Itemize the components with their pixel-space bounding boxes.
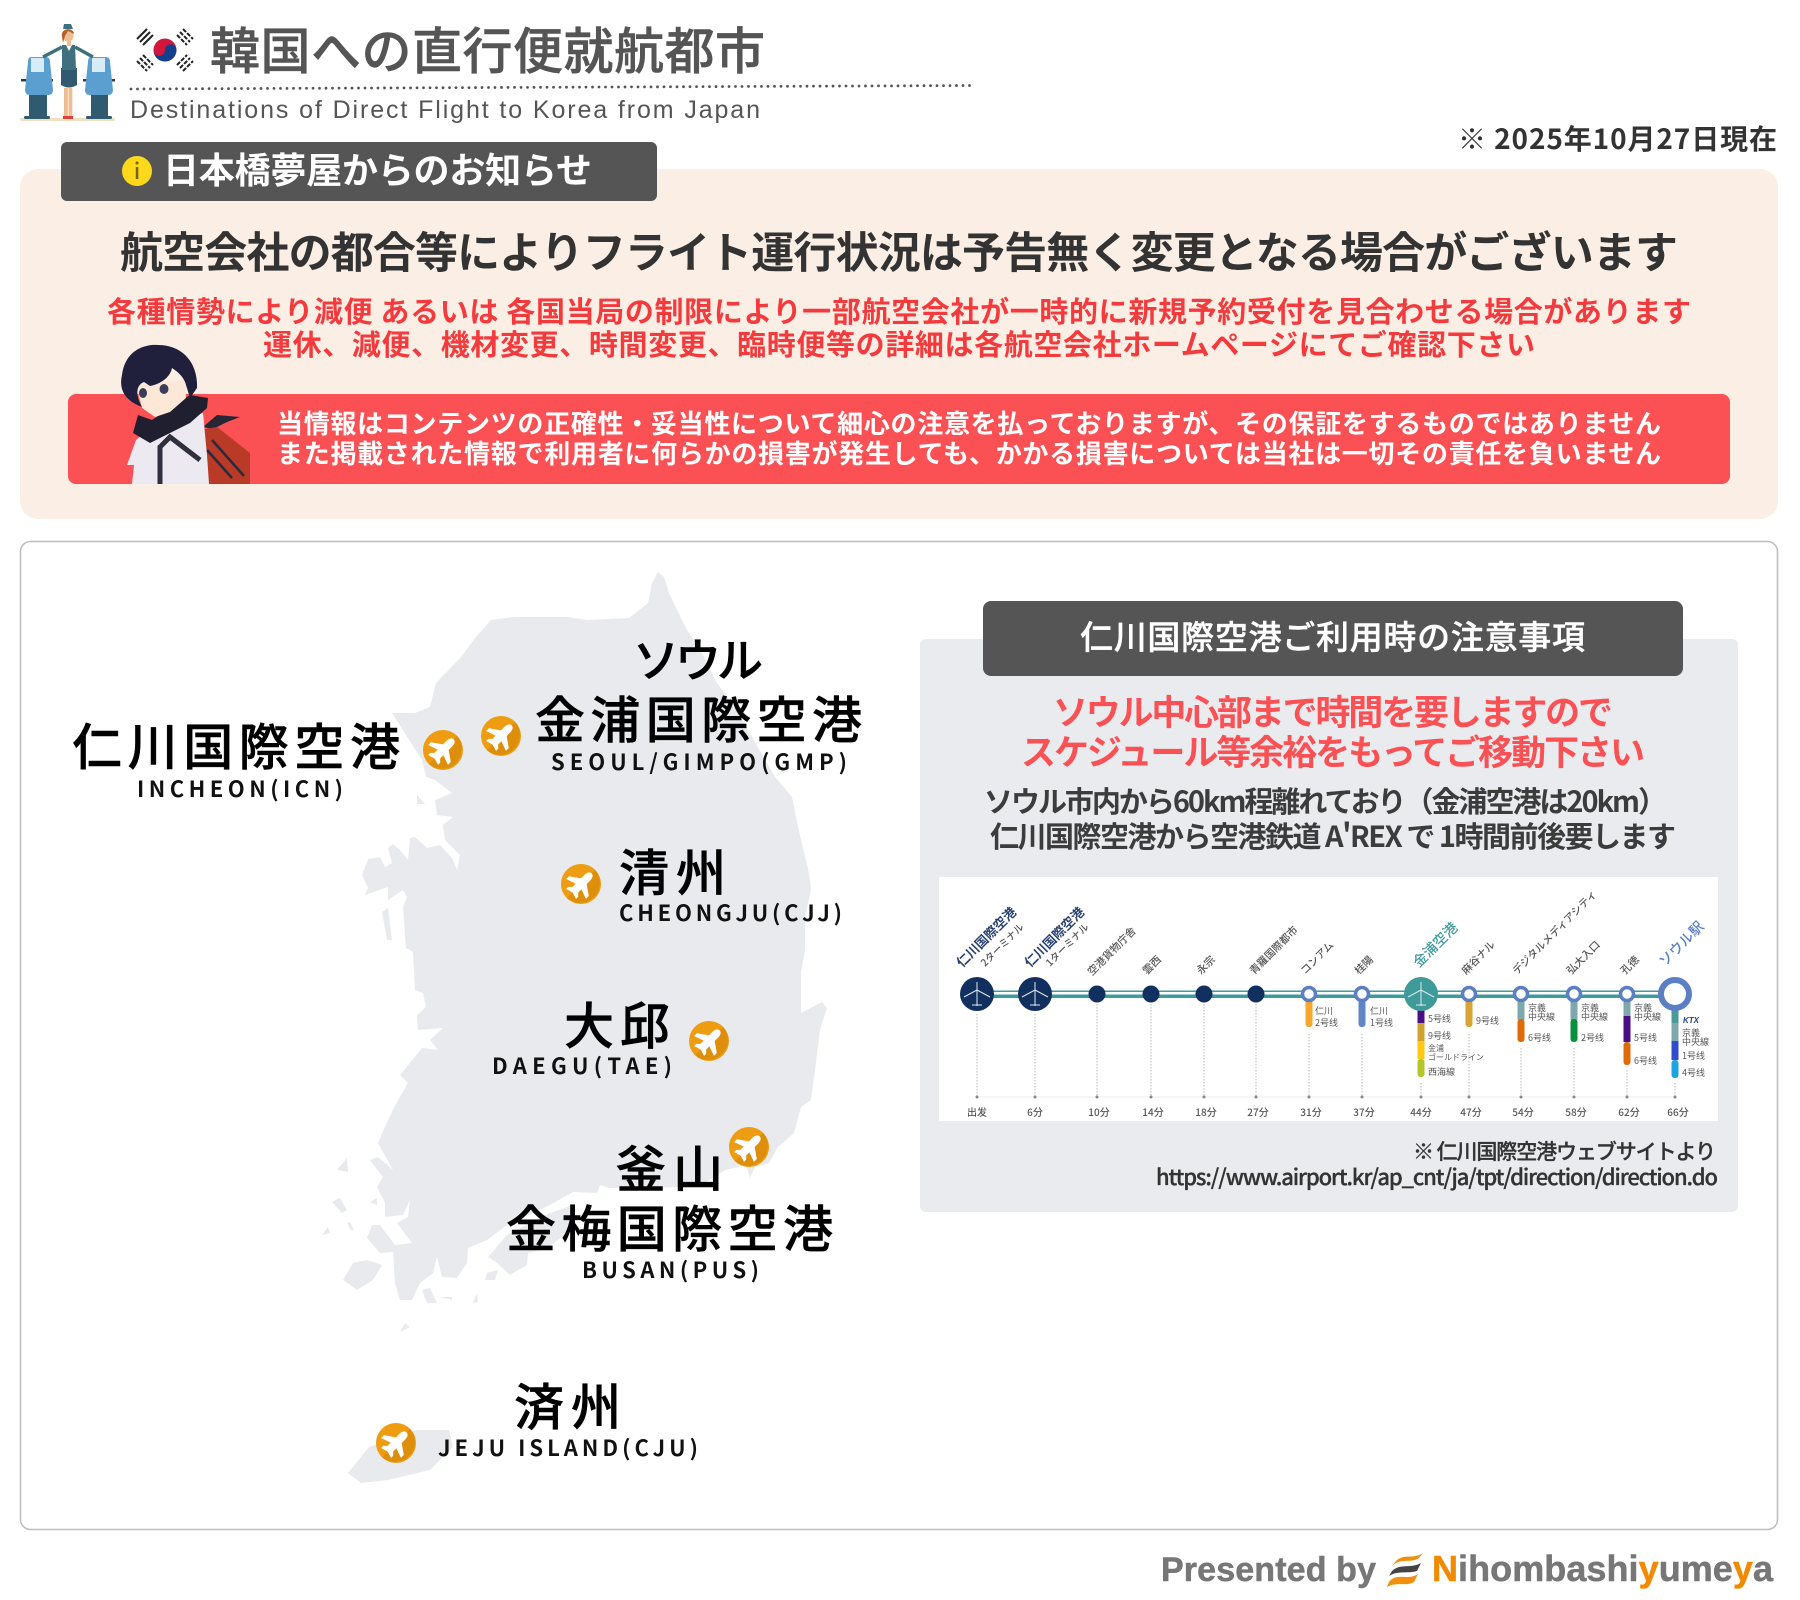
icon: logo bbox=[1387, 1553, 1423, 1587]
icon: Korean flag bbox=[137, 29, 193, 71]
line names: 5号线 bbox=[1428, 1012, 1451, 1025]
line names: 京義 bbox=[1581, 1001, 1599, 1014]
rotated station names: 青羅国際都市 bbox=[1246, 922, 1302, 978]
panel: Incheon airport notes bbox=[920, 601, 1738, 1212]
travel times: 44分 bbox=[1410, 1104, 1432, 1119]
travel times: 37分 bbox=[1353, 1104, 1375, 1119]
line names: 9号线 bbox=[1428, 1029, 1451, 1042]
label: Busan: 金梅国際空港 bbox=[506, 1190, 833, 1262]
rotated station names: コンアム bbox=[1297, 938, 1337, 978]
marker: Incheon bbox=[423, 729, 464, 770]
label: Incheon: 仁川国際空港 bbox=[72, 708, 400, 780]
travel times: 66分 bbox=[1667, 1104, 1689, 1119]
rotated station names: 孔徳 bbox=[1617, 952, 1643, 978]
label: Seoul Gimpo: 金浦国際空港 bbox=[535, 681, 862, 753]
marker: Busan bbox=[729, 1126, 770, 1167]
panel: map frame bbox=[20, 542, 1778, 1530]
travel times: 58分 bbox=[1565, 1104, 1587, 1119]
line colour strips bbox=[1306, 1000, 1678, 1078]
footer: presented by bbox=[1161, 1548, 1774, 1589]
notice tab: i bbox=[134, 154, 140, 186]
label: Daegu: 大邱 bbox=[564, 987, 670, 1059]
disclaimer bar: また掲載された情報で利用者に何らかの損害が発生しても、かかる損害については当社は一切その責任を負いません bbox=[277, 434, 1661, 471]
explanation text: 仁川国際空港から空港鉄道 A'REX で 1時間前後要します bbox=[990, 814, 1676, 856]
line names: 1号线 bbox=[1370, 1016, 1393, 1029]
travel times: 31分 bbox=[1300, 1104, 1322, 1119]
explanation text bbox=[984, 779, 1676, 856]
line names: ゴールドライン bbox=[1428, 1052, 1484, 1063]
line names: 9号线 bbox=[1476, 1014, 1499, 1027]
line names: 2号线 bbox=[1315, 1016, 1338, 1029]
label: Incheon: INCHEON(ICN) bbox=[137, 772, 343, 804]
line names: 4号线 bbox=[1682, 1066, 1705, 1079]
travel times: 14分 bbox=[1142, 1104, 1164, 1119]
rotated station names: 雲西 bbox=[1139, 952, 1165, 978]
rotated station names: 仁川国際空港 bbox=[1019, 902, 1088, 971]
line names: 5号线 bbox=[1634, 1031, 1657, 1044]
icon: flight attendant and seats bbox=[20, 24, 115, 121]
title: 韓国への直行便就航都市 bbox=[210, 12, 765, 84]
line names: KTX bbox=[1683, 1016, 1700, 1025]
route diagram bbox=[939, 877, 1718, 1121]
rotated station names: 弘大入口 bbox=[1563, 938, 1604, 978]
notice heading: 航空会社の都合等によりフライト運行状況は予告無く変更となる場合がございます bbox=[120, 219, 1678, 281]
label: Seoul Gimpo bbox=[535, 625, 862, 777]
line names: 京義 bbox=[1682, 1026, 1700, 1039]
subtitle: Destinations of Direct Flight to Korea from Japan bbox=[130, 96, 760, 124]
label: Seoul Gimpo: SEOUL/GIMPO(GMP) bbox=[551, 745, 847, 777]
travel times: 6分 bbox=[1027, 1104, 1043, 1119]
label: Jeju bbox=[438, 1368, 698, 1463]
date note: ※ 2025年10月27日現在 bbox=[1458, 118, 1777, 158]
rotated station names: 空港貨物庁舎 bbox=[1084, 923, 1140, 979]
rotated station names: 2ターミナル bbox=[977, 919, 1027, 969]
rotated station names: 永宗 bbox=[1193, 952, 1219, 978]
label: Jeju: 済州 bbox=[514, 1368, 621, 1440]
travel times: 18分 bbox=[1195, 1104, 1217, 1119]
travel times: 27分 bbox=[1247, 1104, 1269, 1119]
travel times: 62分 bbox=[1618, 1104, 1640, 1119]
label: Busan: BUSAN(PUS) bbox=[582, 1253, 759, 1285]
travel times: 54分 bbox=[1512, 1104, 1534, 1119]
line names: 京義 bbox=[1528, 1001, 1546, 1014]
line names: 西海線 bbox=[1428, 1065, 1455, 1078]
label: Busan: 釜山 bbox=[616, 1130, 723, 1202]
line names: 京義 bbox=[1634, 1001, 1652, 1014]
notice tab: 日本橋夢屋からのお知らせ bbox=[163, 142, 592, 194]
rotated station names: 麻谷ナル bbox=[1458, 937, 1499, 978]
notice tab bbox=[61, 142, 657, 201]
line names: 1号线 bbox=[1682, 1049, 1705, 1062]
marker: Gimpo bbox=[481, 715, 522, 756]
label: Busan bbox=[506, 1130, 833, 1285]
disclaimer bar bbox=[68, 394, 1730, 484]
Jeju island bbox=[348, 1430, 453, 1483]
travel times: 47分 bbox=[1460, 1104, 1482, 1119]
marker: Jeju bbox=[376, 1422, 417, 1463]
line names: 仁川 bbox=[1315, 1004, 1333, 1017]
red notice text: 運休、減便、機材変更、時間変更、臨時便等の詳細は各航空会社ホームページにてご確認下さい bbox=[263, 322, 1535, 364]
rotated station names: デジタルメディアシティ bbox=[1509, 887, 1600, 978]
line names: 金浦 bbox=[1428, 1043, 1444, 1054]
footer: presented by: Presented by bbox=[1161, 1551, 1376, 1589]
line names: 中央線 bbox=[1581, 1010, 1608, 1023]
red notice text bbox=[107, 289, 1691, 364]
travel times: 出发 bbox=[967, 1104, 987, 1119]
marker: Cheongju bbox=[561, 863, 602, 904]
line names: 中央線 bbox=[1528, 1010, 1555, 1023]
rotated station names: 桂陽 bbox=[1351, 952, 1377, 978]
explanation text: ソウル市内から60km程離れており（金浦空港は20km） bbox=[984, 779, 1667, 821]
label: Daegu bbox=[492, 987, 672, 1081]
line names: 6号线 bbox=[1528, 1031, 1551, 1044]
red headline: スケジュール等余裕をもってご移動下さい bbox=[1021, 725, 1645, 776]
line names: 仁川 bbox=[1370, 1004, 1388, 1017]
source note bbox=[1156, 1136, 1718, 1192]
stations bbox=[960, 977, 1689, 1011]
panel heading bbox=[983, 601, 1683, 676]
label: Cheongju: CHEONGJU(CJJ) bbox=[619, 896, 842, 928]
disclaimer bar: 当情報はコンテンツの正確性・妥当性について細心の注意を払っておりますが、その保証をするものではありません bbox=[277, 404, 1661, 441]
rotated station names: ソウル駅 bbox=[1654, 917, 1708, 971]
line names: 2号线 bbox=[1581, 1031, 1604, 1044]
line names: 中央線 bbox=[1634, 1010, 1661, 1023]
label: Daegu: DAEGU(TAE) bbox=[492, 1049, 672, 1081]
red notice text: 各種情勢により減便 あるいは 各国当局の制限により一部航空会社が一時的に新規予約受付を見合わせる場合があります bbox=[107, 289, 1691, 331]
travel times: 10分 bbox=[1088, 1104, 1110, 1119]
red headline: ソウル中心部まで時間を要しますので bbox=[1053, 685, 1613, 736]
travel times bbox=[967, 1104, 1689, 1119]
marker: Daegu bbox=[689, 1020, 730, 1061]
rotated station names: 1ターミナル bbox=[1042, 919, 1092, 969]
line names: 6号线 bbox=[1634, 1054, 1657, 1067]
source note: ※ 仁川国際空港ウェブサイトより bbox=[1413, 1136, 1716, 1166]
source note: https://www.airport.kr/ap_cnt/ja/tpt/direction/direction.do bbox=[1156, 1160, 1718, 1192]
panel heading: 仁川国際空港ご利用時の注意事項 bbox=[1080, 611, 1585, 659]
rotated station names: 金浦空港 bbox=[1408, 918, 1462, 972]
label: Cheongju bbox=[619, 834, 842, 928]
label: Seoul Gimpo: ソウル bbox=[633, 625, 763, 691]
rotated station names: 仁川国際空港 bbox=[951, 902, 1020, 971]
map of South Korea bbox=[322, 572, 827, 1483]
line names bbox=[1315, 1001, 1709, 1079]
line names: 中央線 bbox=[1682, 1035, 1709, 1048]
label: Jeju: JEJU ISLAND(CJU) bbox=[438, 1431, 698, 1463]
panel: notice bbox=[20, 142, 1778, 519]
label: Cheongju: 清州 bbox=[619, 834, 726, 906]
rotated station names bbox=[951, 887, 1708, 979]
footer: presented by: Nihombashiyumeya bbox=[1432, 1548, 1774, 1589]
illustration: traveller girl bbox=[121, 345, 250, 484]
red headline bbox=[1021, 685, 1645, 776]
